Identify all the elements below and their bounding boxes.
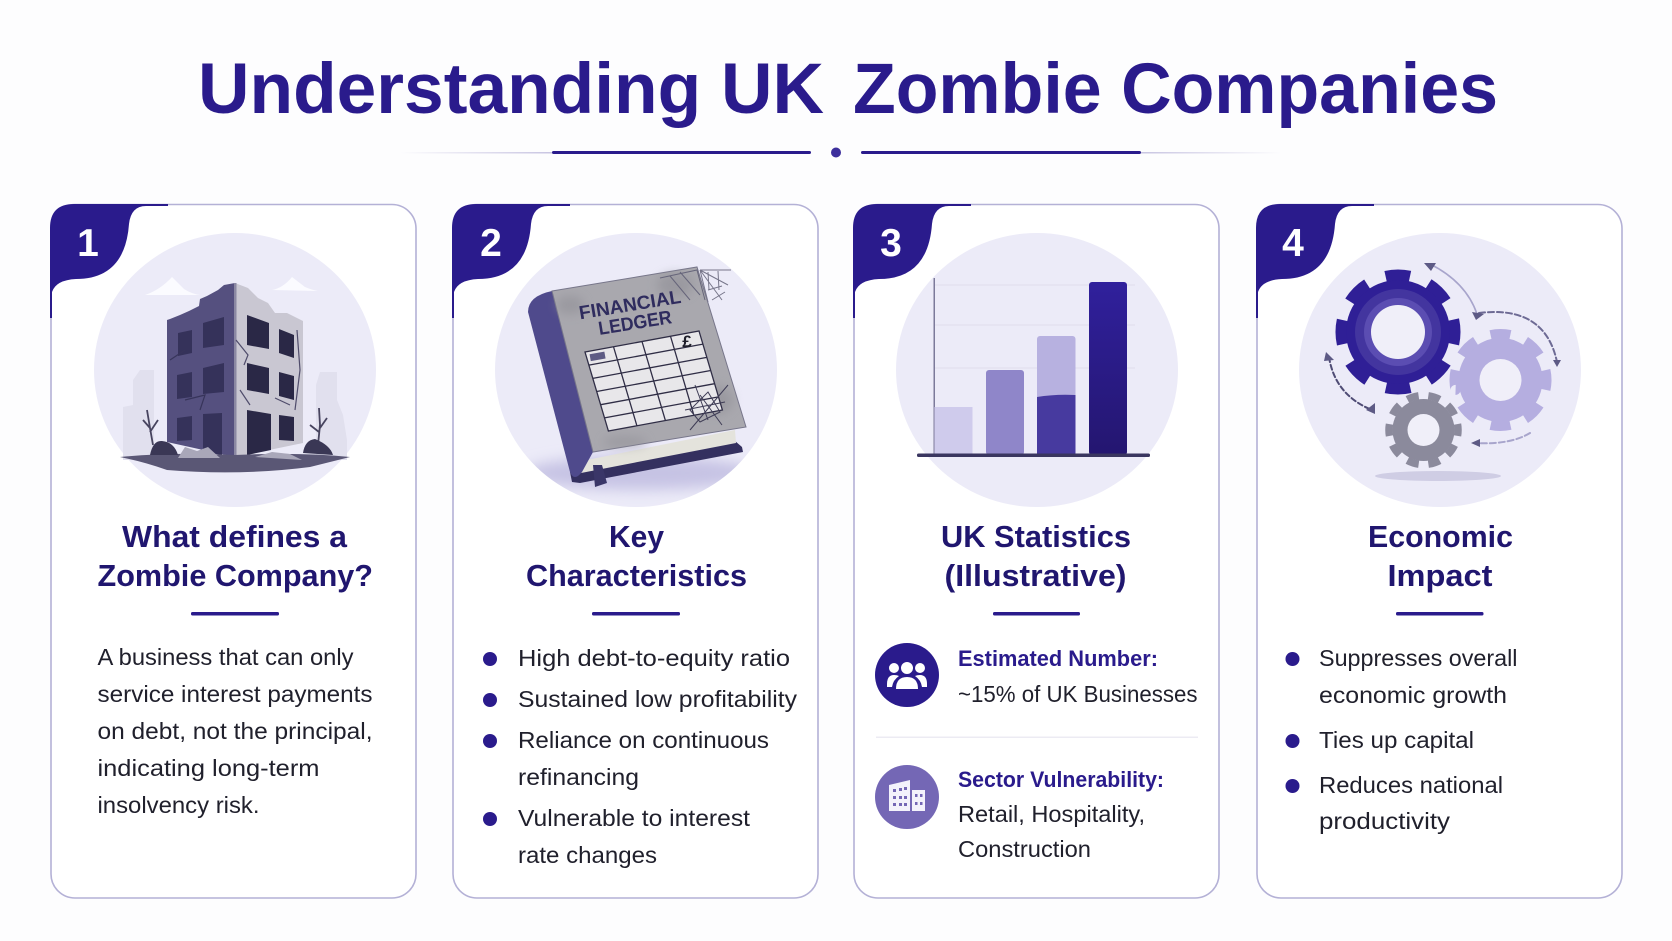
illustration: derelict building <box>94 233 376 507</box>
icon: buildings <box>875 765 939 829</box>
bullet list: economic growth <box>1319 682 1507 708</box>
illustration: gears <box>1299 233 1581 507</box>
bullet list <box>483 645 797 868</box>
number badge 1: 1 <box>77 222 99 265</box>
heading <box>98 519 373 593</box>
heading: Impact <box>1388 558 1492 593</box>
panel: economic impact <box>1256 204 1622 898</box>
heading: (Illustrative) <box>944 558 1126 593</box>
body text <box>98 644 372 818</box>
heading: Zombie Company? <box>98 558 373 593</box>
heading <box>941 519 1131 593</box>
small gear <box>1384 390 1463 470</box>
icon: people <box>875 643 939 707</box>
number badge 2: 2 <box>480 222 502 265</box>
big gear <box>1330 264 1466 400</box>
heading: What defines a <box>122 519 348 554</box>
bullet list: Sustained low profitability <box>518 686 797 712</box>
bullet list: productivity <box>1319 808 1450 834</box>
heading <box>1368 519 1513 593</box>
heading: UK Statistics <box>941 519 1131 554</box>
stat: estimated number: ~15% of UK Businesses <box>958 681 1198 707</box>
stat: estimated number: Estimated Number: <box>958 646 1158 671</box>
bullet list: Suppresses overall <box>1319 645 1518 671</box>
number badge 3 <box>853 204 971 318</box>
bullet list: Ties up capital <box>1319 727 1474 753</box>
number badge 4: 4 <box>1282 222 1304 265</box>
panel: UK statistics <box>853 204 1219 898</box>
title: Zombie Companies <box>853 50 1498 129</box>
illustration: financial ledger book: £ <box>682 332 692 351</box>
body text: indicating long-term <box>98 755 320 781</box>
stat: sector vulnerability: Construction <box>958 836 1091 862</box>
stat: sector vulnerability: Retail, Hospitality, <box>958 801 1145 827</box>
bullet list: Reduces national <box>1319 772 1503 798</box>
number badge 4 <box>1256 204 1374 318</box>
illustration: financial ledger book <box>495 233 777 507</box>
bullet list: rate changes <box>518 842 657 868</box>
bullet list: High debt-to-equity ratio <box>518 645 790 671</box>
heading: Characteristics <box>526 558 747 593</box>
panel: what defines a zombie company <box>50 204 416 898</box>
bullet list: Vulnerable to interest <box>518 805 750 831</box>
illustration: financial ledger book: FINANCIAL <box>578 287 683 324</box>
bar chart illustration <box>896 233 1178 507</box>
heading: Economic <box>1368 519 1513 554</box>
bullet list: Reliance on continuous <box>518 727 769 753</box>
title <box>198 50 1498 129</box>
illustration: financial ledger book: LEDGER <box>597 307 674 340</box>
medium gear <box>1446 325 1555 435</box>
stat: sector vulnerability: Sector Vulnerability: <box>958 767 1164 792</box>
heading: Key <box>609 519 665 554</box>
body text: service interest payments <box>98 681 372 707</box>
body text: insolvency risk. <box>98 792 260 818</box>
stat: sector vulnerability <box>958 767 1164 862</box>
number badge 1 <box>50 204 168 318</box>
circular arrows <box>1324 263 1561 447</box>
body text: on debt, not the principal, <box>98 718 372 744</box>
bullet list <box>1286 645 1518 834</box>
number badge 3: 3 <box>880 222 902 265</box>
number badge 2 <box>452 204 570 318</box>
bullet list: refinancing <box>518 764 639 790</box>
panel: key characteristics <box>452 204 818 898</box>
heading <box>526 519 747 593</box>
body text: A business that can only <box>98 644 354 670</box>
stat: estimated number <box>958 646 1198 707</box>
title: Understanding UK <box>198 50 824 129</box>
